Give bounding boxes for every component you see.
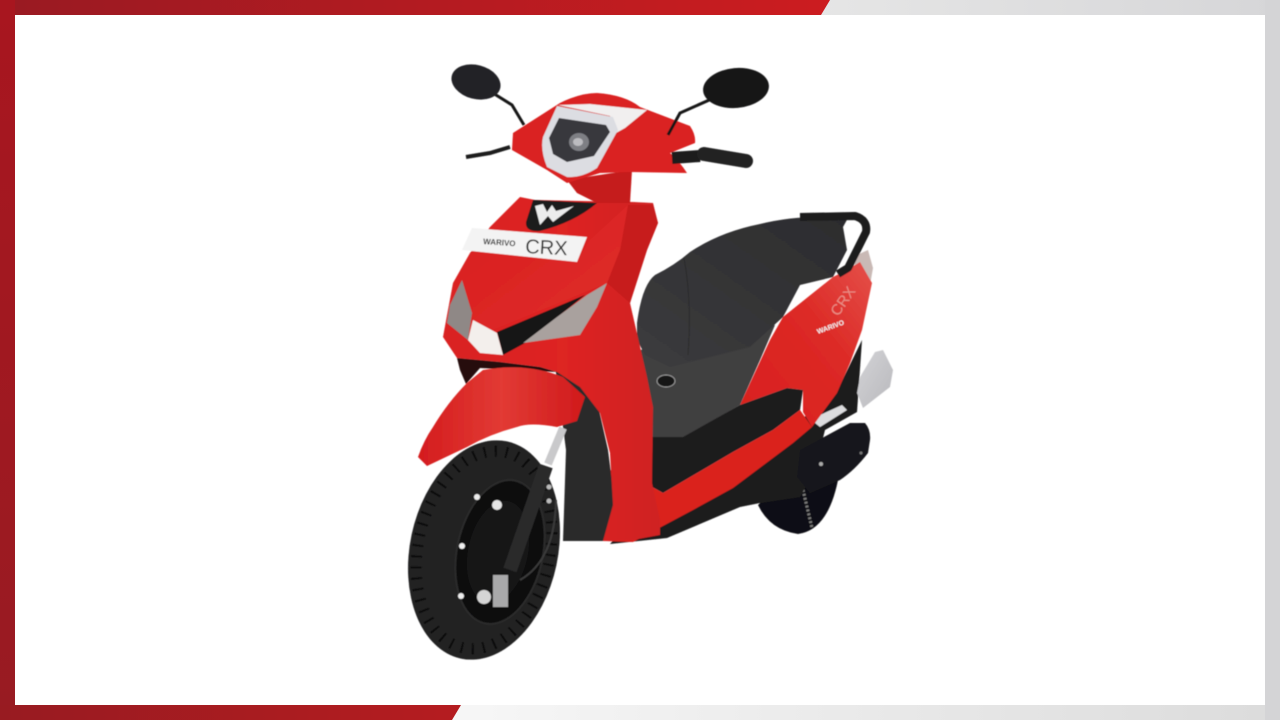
white centre trim [468,320,503,355]
head stem [567,170,632,203]
name plate [462,228,587,262]
grab rail [800,216,866,274]
front fender [418,367,585,466]
white stripe [558,104,647,133]
seat [637,217,848,367]
floorboard [645,388,803,493]
muffler chrome plate [857,350,893,408]
chrome bar [815,405,847,427]
name plate: WARIVO [483,237,516,248]
rear wheel [758,465,838,534]
left handlebar lever [466,147,510,157]
rear side logo: WARIVO [816,319,846,336]
headlight opening [457,358,557,384]
scooter [389,59,893,674]
rear side model text: CRX [827,284,859,319]
body lower strip [603,410,812,542]
seat pad seam [684,258,689,355]
rear body panel [740,262,872,427]
tail lamp [850,250,873,285]
head cowl [512,93,695,183]
headlight [542,106,618,177]
muffler bolts [819,452,862,466]
leg shield [443,197,660,541]
muffler [797,423,870,493]
name plate: CRX [525,236,568,260]
W logo panel [526,200,597,231]
front wheel [389,426,579,674]
right headlamp [497,283,607,355]
left mirror [447,59,524,125]
underbody and engine [610,340,862,544]
inner dark panel [640,325,775,440]
front fork [510,428,563,570]
lock [657,375,675,387]
cowl dark edge shading [607,205,658,303]
hood panel [465,205,628,330]
right mirror [668,65,771,135]
left headlamp [447,280,472,340]
right handlebar grip [672,154,746,161]
front mudflap [555,365,615,541]
